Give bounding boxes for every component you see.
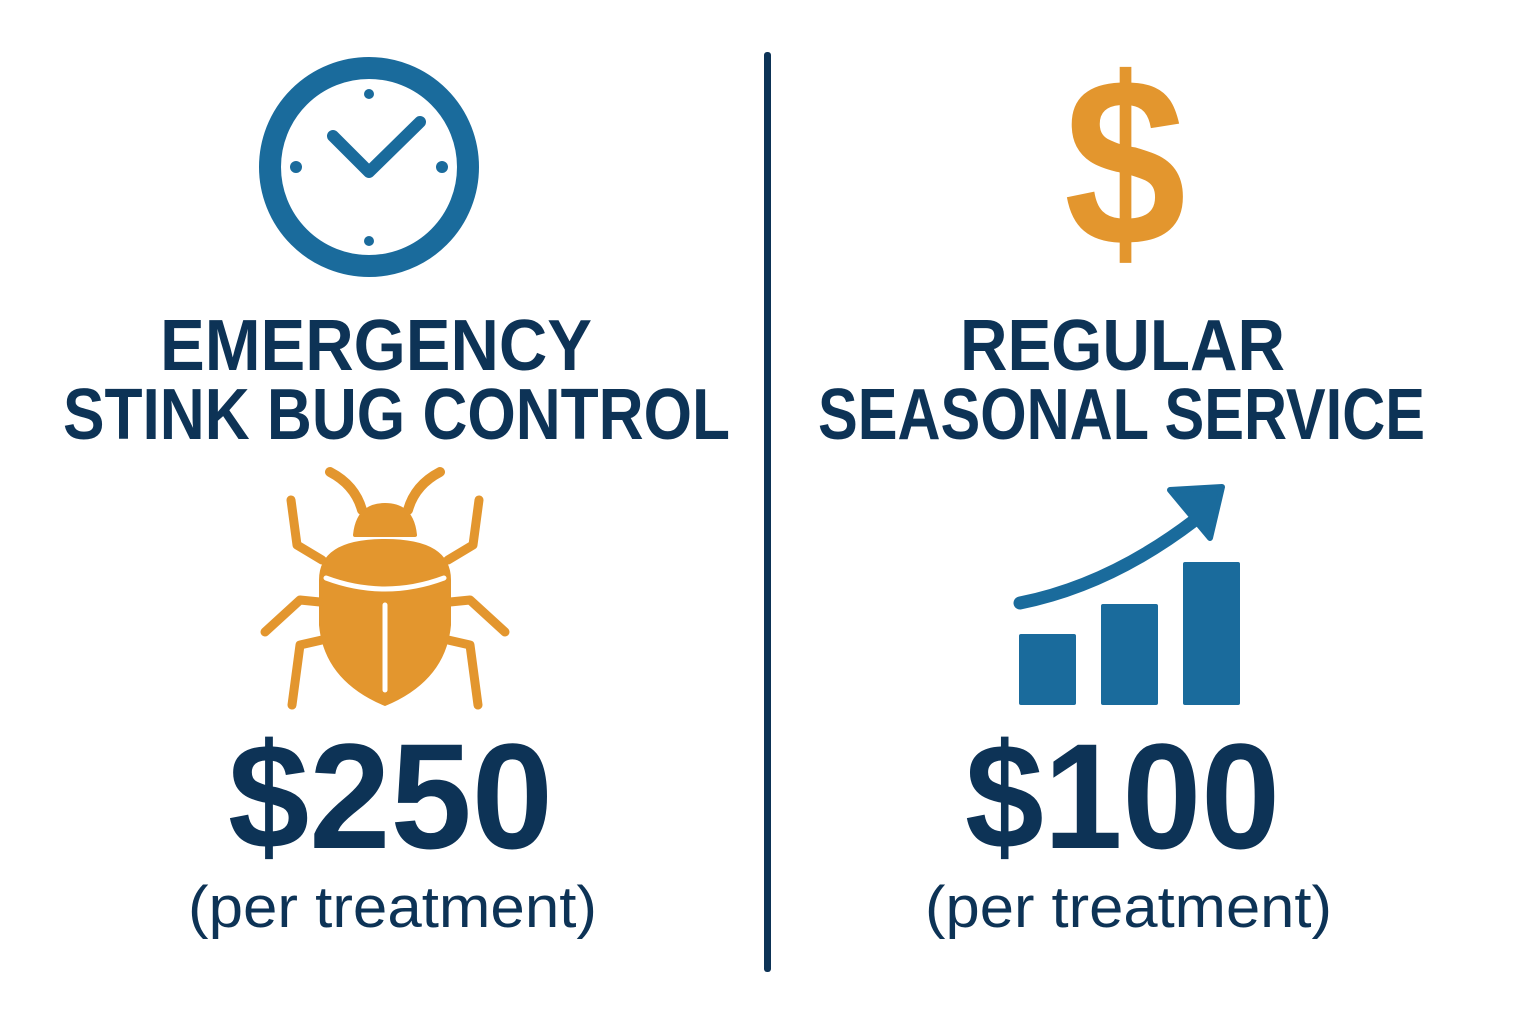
icon: clock (270, 68, 468, 266)
divider (764, 52, 771, 972)
heading: regular seasonal service: SEASONAL SERVICE (818, 375, 1425, 455)
heading: regular seasonal service (818, 306, 1425, 455)
heading: emergency stink bug control (63, 306, 730, 455)
icon: stink bug (265, 472, 505, 705)
heading: emergency stink bug control: STINK BUG CONTROL (63, 375, 730, 455)
icon: dollar sign: $ (1064, 28, 1186, 296)
note: per treatment: (per treatment) (925, 875, 1332, 940)
panel: regular seasonal service (818, 28, 1425, 940)
price: $250: $250 (228, 712, 553, 880)
panel: emergency (63, 68, 730, 940)
chart: growth bars with arrow (1019, 487, 1240, 705)
heading: emergency stink bug control: EMERGENCY (160, 306, 592, 386)
heading: regular seasonal service: REGULAR (960, 306, 1285, 386)
note: per treatment: (per treatment) (188, 875, 597, 940)
price: $100: $100 (965, 712, 1280, 880)
